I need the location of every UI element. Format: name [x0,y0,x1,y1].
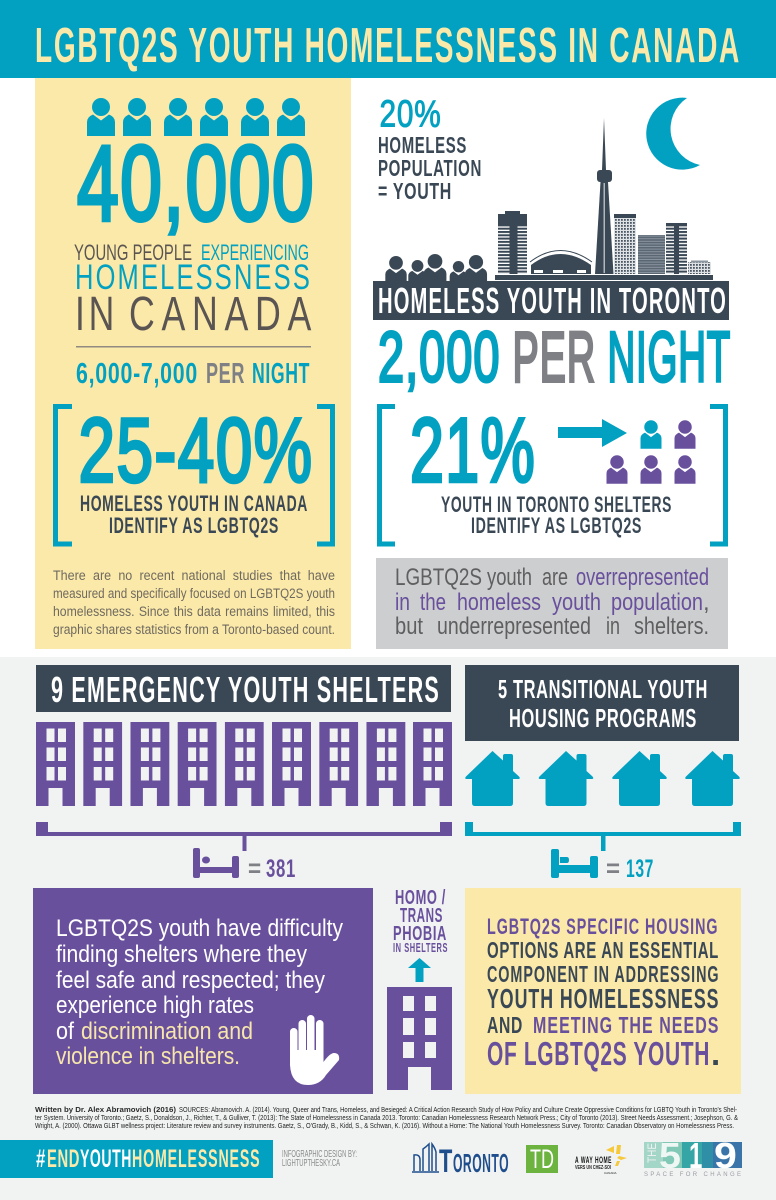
logo: A Way Home: CANADA [604,1171,617,1175]
icon: bed [551,849,598,878]
heading: 9 emergency youth shelters: 9 EMERGENCY YOUTH SHELTERS [51,669,440,710]
text: design credit [282,1148,357,1169]
big number 25-40%: 25-40% [78,400,314,502]
icon: row of six people [87,98,305,136]
callout: overrepresented, underrepresented: are [542,564,568,591]
big number 21%: 21% [410,400,536,502]
low building [688,260,711,274]
hashtag bar: HOMELESSNESS [132,1145,260,1173]
panel: specific housing options: AND [487,1012,523,1038]
text: note about national data [53,568,335,637]
panel: specific housing options [465,888,741,1094]
text: homo / trans phobia in shelters: HOMO / [395,887,446,909]
hashtag bar: END [47,1145,80,1173]
callout: overrepresented, underrepresented: in [606,613,620,640]
logo: The 519: 5 [659,1135,682,1176]
text: young people experiencing homelessness in Canada: HOMELESSNESS [75,258,312,297]
heading: 5 transitional youth housing programs [465,665,739,741]
text: 6,000-7,000 per night: 6,000-7,000 [76,358,198,390]
text: ORONTO [453,1148,509,1178]
panel: difficulty finding safe shelters: discrimination and [81,1018,253,1045]
text: 20% homeless population = youth: POPULATION [378,155,482,181]
bracket: housing total [465,822,741,851]
icon: shelter building [387,987,452,1090]
logo: City of Toronto [412,1143,509,1179]
logo: A Way Home: A WAY HOME [575,1155,612,1166]
icon: five people, one teal [606,420,696,484]
bed count: 137: = [606,855,621,883]
callout: overrepresented, underrepresented: but [395,613,423,640]
bed count: 381: = [248,855,262,883]
callout: overrepresented, underrepresented [376,558,728,649]
callout: overrepresented, underrepresented: , [703,589,710,616]
bed count: 381: 381 [266,855,296,883]
callout: overrepresented, underrepresented: the [420,589,446,616]
callout: overrepresented, underrepresented: homeless [457,589,541,616]
hashtag bar: YOUTH [80,1145,132,1173]
panel: difficulty finding safe shelters: experience high rates [56,992,254,1019]
dome stadium [530,250,592,274]
heading: 9 emergency youth shelters [36,665,451,712]
panel: Canada statistics [35,78,351,649]
text: author and sources [35,1105,738,1130]
bed count: 137: 137 [626,855,654,883]
text: author and sources: Written by Dr. Alex Abramovich (2016) [35,1105,177,1114]
hashtag bar: # [36,1145,46,1173]
logo: City of Toronto: T [439,1143,453,1179]
panel: difficulty finding safe shelters: LGBTQ2S youth have difficulty [56,915,343,942]
callout: overrepresented, underrepresented: underrepresented [437,613,591,640]
panel: difficulty finding safe shelters: violence in shelters. [56,1043,240,1070]
grid building [614,214,636,274]
header banner [0,0,776,78]
panel: difficulty finding safe shelters: finding shelters where they [56,941,307,968]
bracket: shelters total [36,822,452,851]
text: 2,000 per night: 2,000 [378,318,500,398]
text: design credit: INFOGRAPHIC DESIGN BY: [282,1148,357,1160]
text: youth in Toronto shelters: IDENTIFY AS LGBTQ2S [471,513,642,538]
text: young people experiencing homelessness in Canada: IN [75,288,118,341]
text: youth in Toronto shelters [441,492,672,538]
logo: The 519 [644,1135,742,1178]
skyline ground [495,275,713,280]
right bracket Toronto [710,406,726,544]
left bracket [56,406,72,544]
callout: overrepresented, underrepresented: population [611,589,703,616]
panel: difficulty finding safe shelters: of [56,1018,74,1045]
illustration: Toronto skyline with people [385,118,713,285]
logo: A Way Home [575,1145,627,1175]
text: 2,000 per night [378,318,731,398]
text: 20% homeless population = youth: = YOUTH [378,178,452,204]
text: identify as LGBTQ2S: IDENTIFY AS LGBTQ2S [109,513,279,538]
text: 20% homeless population = youth: 20% [380,94,442,136]
bed count: 381 [193,848,296,883]
icons: nine shelter buildings [36,722,452,806]
icon: bed [193,848,239,878]
hashtag bar [0,1140,273,1178]
text: young people experiencing homelessness in Canada: CANADA [129,288,318,341]
text: homo / trans phobia in shelters: TRANS [400,905,443,927]
callout: overrepresented, underrepresented: in [395,589,410,616]
text: homo / trans phobia in shelters [393,887,448,955]
text: design credit: LIGHTUPTHESKY.CA [282,1157,340,1169]
panel: difficulty finding safe shelters [33,888,373,1094]
CN tower [595,118,614,274]
text: note about national data: There are no recent national studies that have [53,568,335,583]
icons: four houses [465,751,740,806]
text: homo / trans phobia in shelters: IN SHELTERS [393,940,448,955]
icon: raised hand [290,1015,339,1085]
callout: overrepresented, underrepresented: youth [487,564,532,591]
right bracket [317,406,332,544]
icon: crescent moon [646,98,700,170]
lower section background [0,657,776,1200]
callout: overrepresented, underrepresented: youth [552,589,601,616]
logo: A Way Home: VERS UN CHEZ-SOI [575,1165,611,1171]
striped building [666,223,687,274]
arrow up [408,958,431,982]
text: 6,000-7,000 per night: PER [206,358,245,390]
text: young people experiencing homelessness in Canada: YOUNG PEOPLE [74,240,192,265]
text: homo / trans phobia in shelters: PHOBIA [393,923,447,945]
bed count: 137 [551,849,654,883]
tower building [498,211,527,274]
text: identify as LGBTQ2S: HOMELESS YOUTH IN CANADA [80,491,308,516]
callout: overrepresented, underrepresented: LGBTQ2S [395,564,482,591]
arrow to people [558,419,627,447]
logo: The 519: 9 [714,1135,738,1176]
text: note about national data: graphic shares statistics from a Toronto-based count. [53,622,335,637]
panel: specific housing options: . [711,1035,721,1072]
text: young people experiencing homelessness in Canada: EXPERIENCING [201,240,309,265]
big number 40,000: 40,000 [77,123,315,243]
left bracket Toronto [380,406,395,544]
mid building [638,235,665,274]
text: note about national data: measured and specifically focused on LGBTQ2S youth [53,586,335,601]
logo: The 519: THE [645,1143,659,1163]
text: young people experiencing homelessness in Canada [74,240,318,341]
logo: The 519: 1 [689,1135,703,1176]
text: 2,000 per night: PER [512,318,596,398]
people silhouettes [385,254,487,285]
callout: overrepresented, underrepresented: shelters. [634,613,709,640]
text: note about national data: homelessness. Since this data remains limited, this [53,604,335,619]
text: 6,000-7,000 per night: NIGHT [252,358,310,390]
logo: TD: TD [530,1144,554,1174]
text: identify as LGBTQ2S [80,491,308,538]
callout: overrepresented, underrepresented: overrepresented [576,564,709,591]
logo: The 519: SPACE FOR CHANGE [644,1172,741,1178]
text: 20% homeless population = youth [378,94,482,204]
text: 20% homeless population = youth: HOMELESS [378,132,467,158]
panel: difficulty finding safe shelters: feel safe and respected; they [56,967,325,994]
